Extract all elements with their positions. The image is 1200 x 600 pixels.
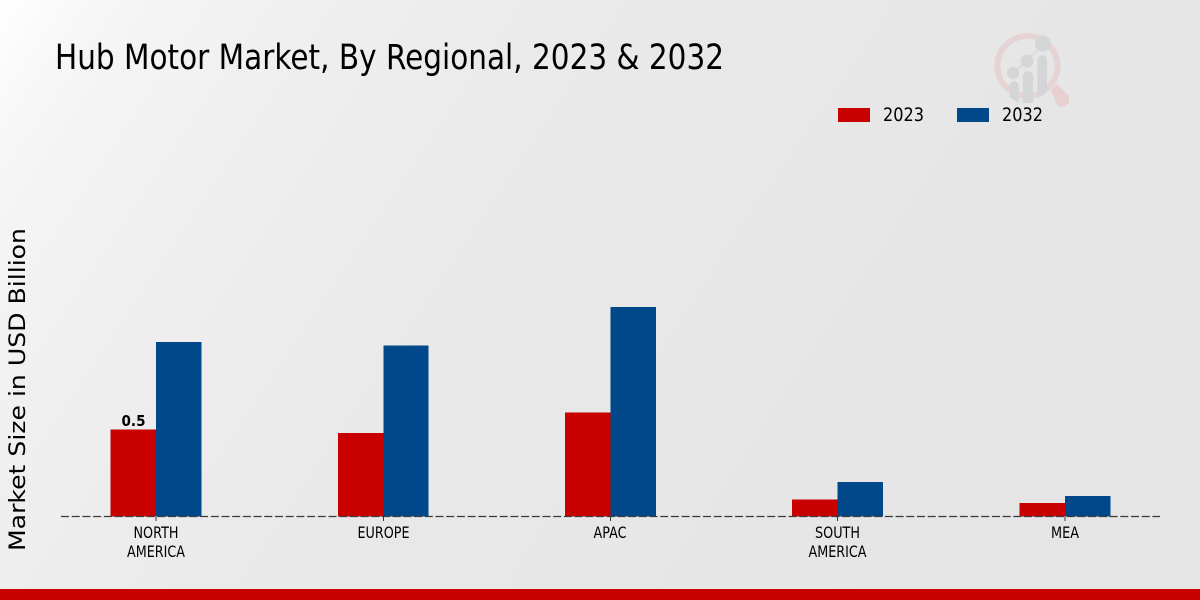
x axis labels [127, 523, 1079, 561]
bars: North America [110, 342, 202, 516]
label: South America: SOUTH [815, 523, 860, 542]
bars: Europe [338, 346, 428, 516]
title: Hub Motor Market, By Regional, 2023 & 2032 [55, 38, 724, 78]
legend: 2032: 2032 [1002, 104, 1043, 126]
bars: APAC [565, 307, 656, 516]
label: MEA: MEA [1051, 523, 1079, 542]
legend: 2023 [838, 104, 924, 126]
icon: watermark logo [998, 36, 1069, 107]
label: South America [808, 523, 867, 561]
bar chart [61, 307, 1160, 521]
legend [838, 104, 1043, 126]
data label: 0.5: 0.5 [122, 412, 146, 430]
y axis title: Market Size in USD Billion [5, 228, 31, 551]
bars: MEA [1020, 496, 1110, 516]
label: APAC: APAC [594, 523, 626, 542]
footer bar [0, 589, 1200, 600]
legend: 2032 [957, 104, 1043, 126]
label: South America: AMERICA [808, 542, 867, 561]
bars: South America [792, 482, 883, 516]
label: North America [127, 523, 185, 561]
legend: 2023: 2023 [883, 104, 924, 126]
label: North America: NORTH [134, 523, 178, 542]
label: Europe: EUROPE [358, 523, 410, 542]
label: North America: AMERICA [127, 542, 185, 561]
